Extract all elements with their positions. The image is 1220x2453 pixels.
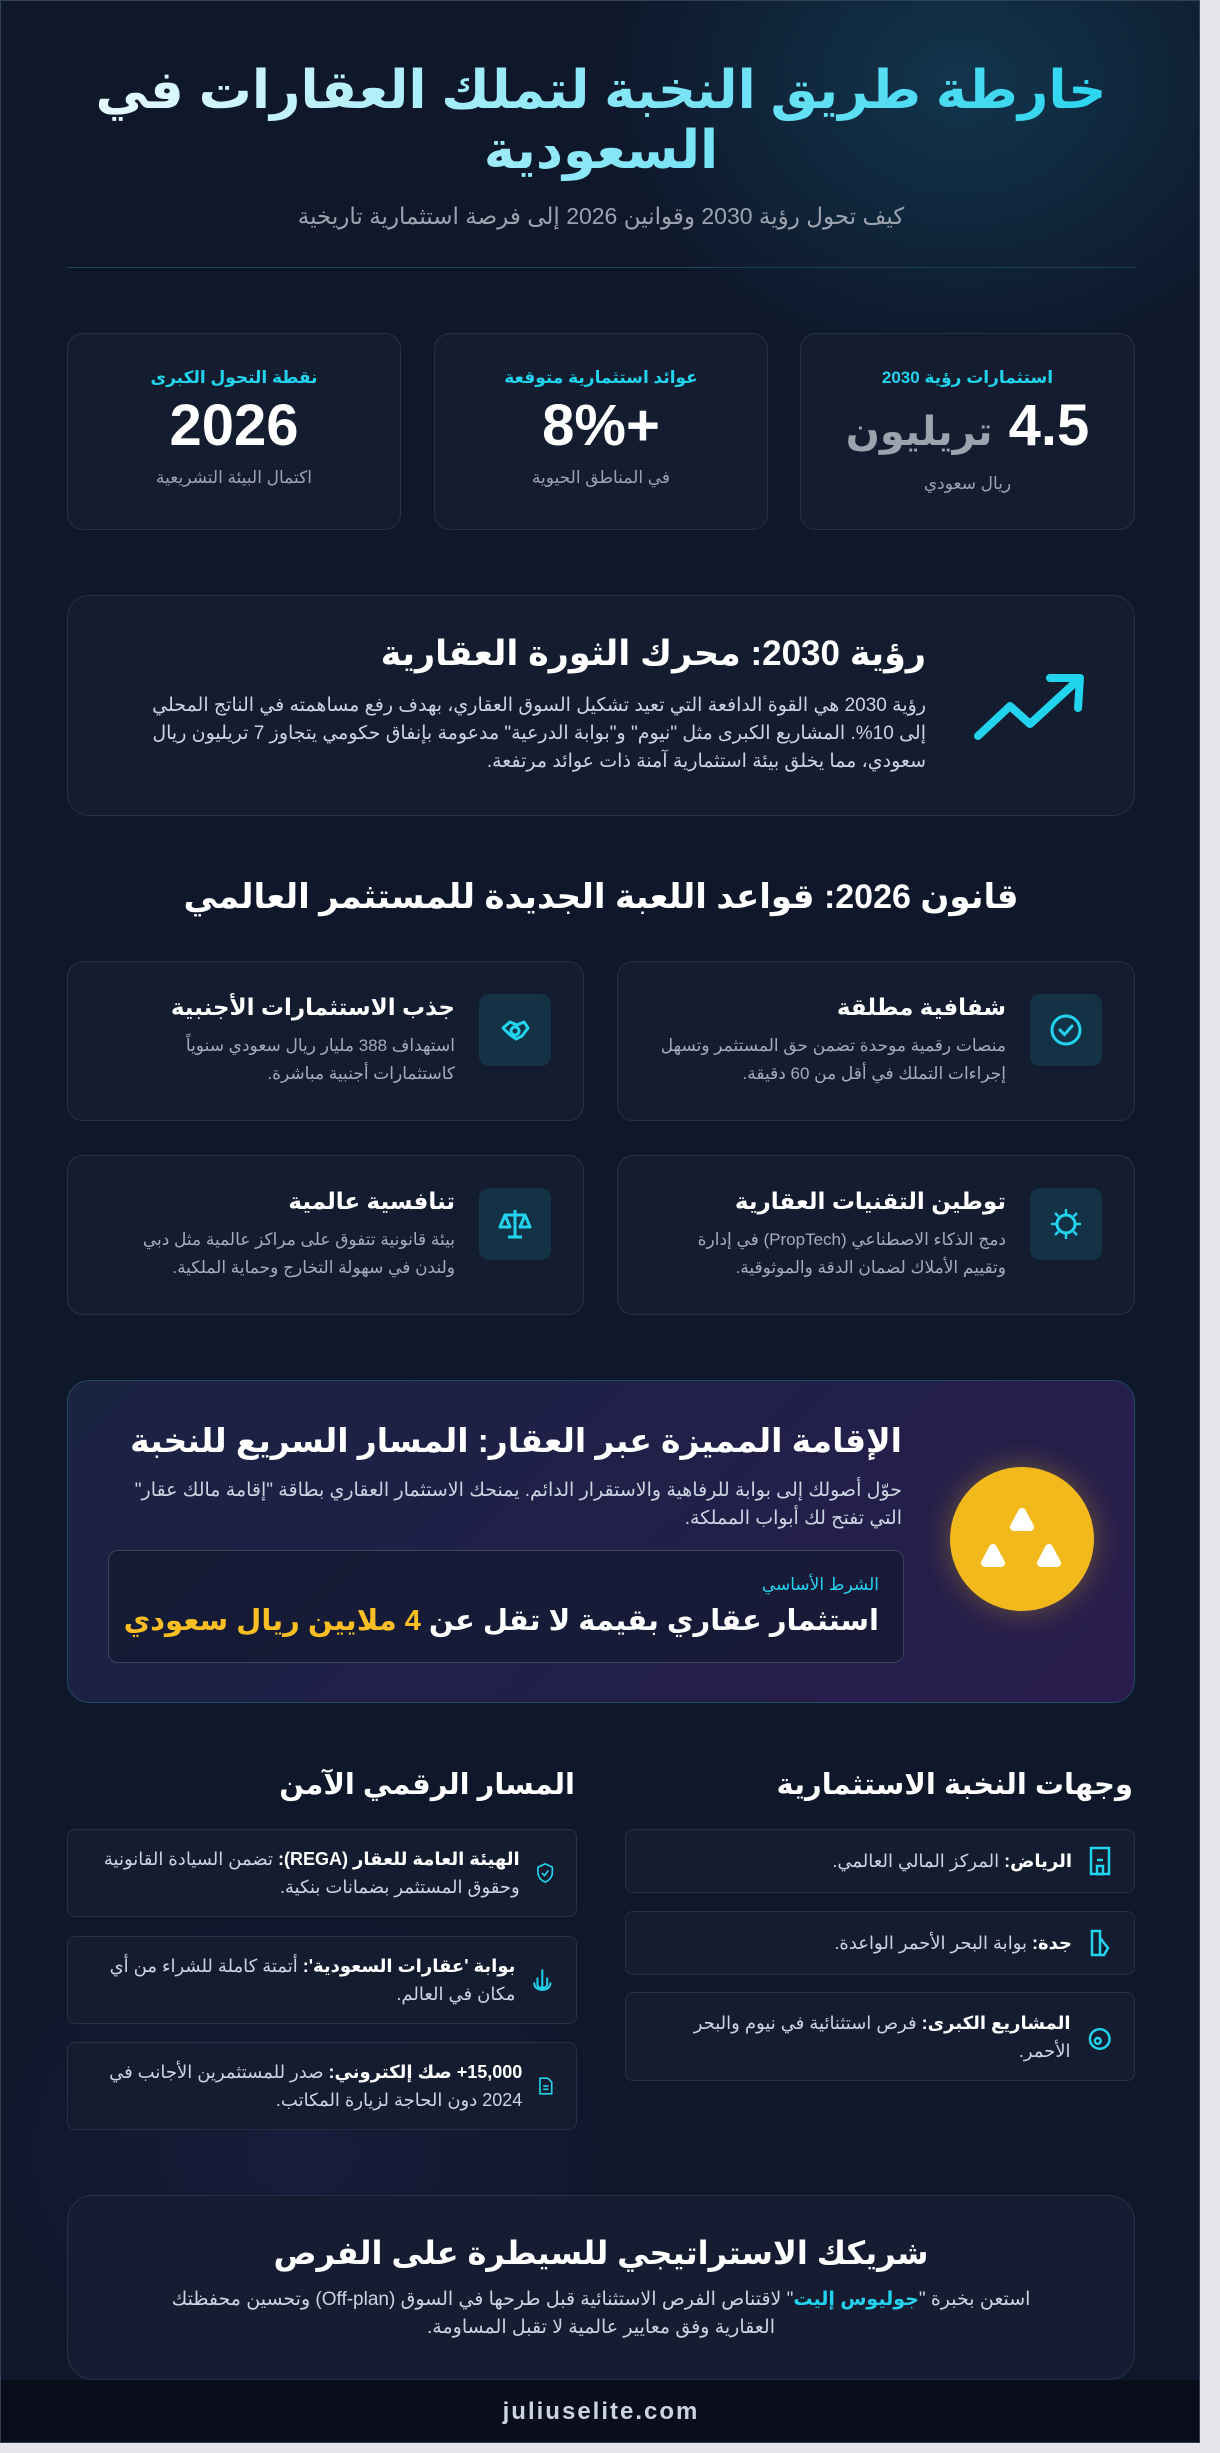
item: riyadh: الرياض: المركز المالي العالمي. xyxy=(832,1851,1072,1871)
item: riyadh xyxy=(625,1829,1135,1893)
item: portal xyxy=(67,1936,577,2024)
body: حوّل أصولك إلى بوابة للرفاهية والاستقرار الدائم. يمنحك الاستثمار العقاري بطاقة "إقامة مالك عقار" التي تفتح لك أبواب المملكة. xyxy=(135,1480,902,1529)
panel: CTA xyxy=(67,2195,1135,2380)
card: foreign investment xyxy=(67,961,584,1121)
icon: trend arrow xyxy=(974,674,1084,740)
icon: gold coin xyxy=(950,1467,1094,1611)
heading: رؤية 2030: محرك الثورة العقارية xyxy=(381,634,926,673)
callout: condition: الشرط الأساسي xyxy=(762,1575,879,1594)
panel: premium residency xyxy=(67,1380,1135,1703)
stat card: returns xyxy=(434,333,768,530)
stat card: 2030 investments: ريال سعودي xyxy=(924,474,1011,493)
icon: wave xyxy=(1090,1930,1110,1956)
stat card: returns: عوائد استثمارية متوقعة xyxy=(504,368,698,387)
section heading: law 2026: قانون 2026: قواعد اللعبة الجديدة للمستثمر العالمي xyxy=(184,878,1018,916)
item: megaprojects xyxy=(625,1992,1135,2081)
panel: CTA: شريكك الاستراتيجي للسيطرة على الفرص xyxy=(273,2235,928,2271)
card: proptech: دمج الذكاء الاصطناعي (PropTech) في إدارة وتقييم الأملاك لضمان الدقة والموثوقية. xyxy=(698,1230,1006,1277)
item: e-deeds: 15,000+ صك إلكتروني: صدر للمستثمرين الأجانب في 2024 دون الحاجة لزيارة المكاتب. xyxy=(109,2062,522,2110)
icon: shield xyxy=(537,1863,554,1883)
item: REGA xyxy=(67,1829,577,1917)
footer: juliuselite.com xyxy=(503,2398,699,2425)
icon: handshake xyxy=(479,994,551,1066)
icon: scales xyxy=(479,1188,551,1260)
item: e-deeds xyxy=(67,2042,577,2130)
stat card: 2026: اكتمال البيئة التشريعية xyxy=(156,468,312,487)
stat card: 2026: نقطة التحول الكبرى xyxy=(151,368,317,387)
stat card: 2026 xyxy=(67,333,401,530)
stat card: returns: في المناطق الحيوية xyxy=(532,468,670,487)
footer xyxy=(1,2380,1201,2444)
stat card: 2030 investments xyxy=(800,333,1135,530)
icon: document xyxy=(539,2077,553,2095)
stat card: 2030 investments: استثمارات رؤية 2030 xyxy=(882,368,1053,387)
subtitle: كيف تحول رؤية 2030 وقوانين 2026 إلى فرصة استثمارية تاريخية xyxy=(298,203,904,229)
item: jeddah xyxy=(625,1911,1135,1975)
stat card: returns: +8% xyxy=(542,393,660,458)
stat card: 2026: 2026 xyxy=(169,393,299,458)
body text: رؤية 2030 هي القوة الدافعة التي تعيد تشكيل السوق العقاري، بهدف رفع مساهمته في الناتج المحلي إلى 10%. المشاريع الكبرى مثل "نيوم" و"بوابة الدرعية" مدعومة بإنفاق حكومي يتجاوز 7 تريليون ريال سعودي، مما يخلق بيئة استثمارية آمنة ذات عوائد مرتفعة. xyxy=(152,695,926,772)
panel: vision 2030 xyxy=(67,595,1135,816)
card: transparency: منصات رقمية موحدة تضمن حق المستثمر وتسهل إجراءات التملك في أقل من 60 دقيقة. xyxy=(661,1036,1006,1083)
heading: elite destinations: وجهات النخبة الاستثمارية xyxy=(777,1769,1133,1801)
panel: CTA: استعن بخبرة "جوليوس إليت" لاقتناص الفرص الاستثنائية قبل طرحها في السوق (Off-plan) وتحسين محفظتك العقارية وفق معايير عالمية لا تقبل المساومة. xyxy=(172,2289,1030,2338)
item: portal: بوابة 'عقارات السعودية': أتمتة كاملة للشراء من أي مكان في العالم. xyxy=(110,1956,515,2004)
icon: spiral xyxy=(1088,2028,1111,2050)
card: transparency xyxy=(617,961,1135,1121)
heading: digital path: المسار الرقمي الآمن xyxy=(279,1769,575,1801)
icon: building xyxy=(1090,1846,1110,1876)
icon: fingerprint xyxy=(533,1969,552,1991)
card: global competitiveness: بيئة قانونية تتفوق على مراكز عالمية مثل دبي ولندن في سهولة التخارج وحماية الملكية. xyxy=(143,1230,455,1277)
card: transparency: شفافية مطلقة xyxy=(837,994,1006,1020)
card: foreign investment: استهداف 388 مليار ريال سعودي سنوياً كاستثمارات أجنبية مباشرة. xyxy=(186,1036,455,1083)
item: REGA: الهيئة العامة للعقار (REGA): تضمن السيادة القانونية وحقوق المستثمر بضمانات بنكية. xyxy=(104,1849,520,1897)
heading: الإقامة المميزة عبر العقار: المسار السريع للنخبة xyxy=(130,1422,902,1459)
card: proptech xyxy=(617,1155,1135,1315)
card: global competitiveness: تنافسية عالمية xyxy=(288,1188,455,1214)
item: megaprojects: المشاريع الكبرى: فرص استثنائية في نيوم والبحر الأحمر. xyxy=(694,2012,1071,2060)
title: خارطة طريق النخبة لتملك العقارات في السعودية xyxy=(96,61,1106,180)
stat card: 2030 investments: 4.5 تريليون xyxy=(846,393,1089,458)
item: jeddah: جدة: بوابة البحر الأحمر الواعدة. xyxy=(834,1933,1072,1953)
card: proptech: توطين التقنيات العقارية xyxy=(735,1188,1006,1214)
icon: check xyxy=(1030,994,1102,1066)
callout: condition: استثمار عقاري بقيمة لا تقل عن 4 ملايين ريال سعودي xyxy=(124,1605,879,1637)
icon: chip xyxy=(1030,1188,1102,1260)
callout: condition xyxy=(108,1550,904,1663)
card: foreign investment: جذب الاستثمارات الأجنبية xyxy=(171,994,455,1020)
card: global competitiveness xyxy=(67,1155,584,1315)
